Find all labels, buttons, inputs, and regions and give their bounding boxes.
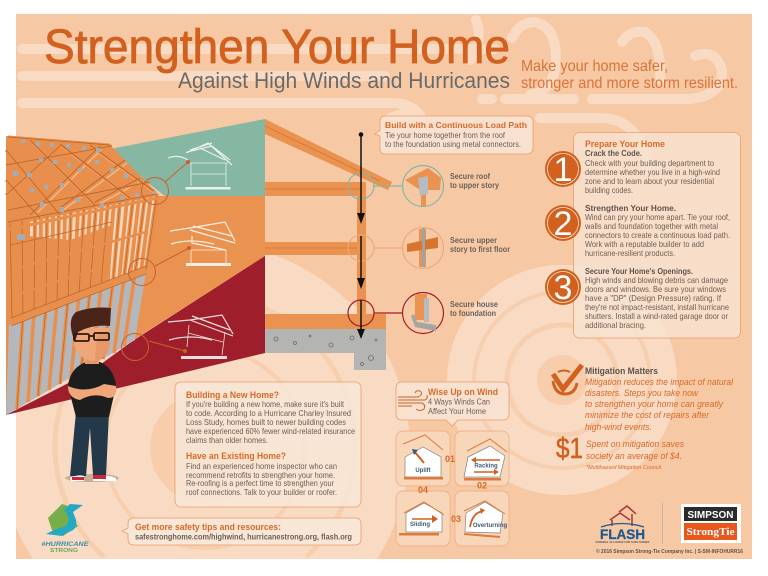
tagline: Make your home safer, <box>521 58 668 75</box>
callout: resources: safestronghome.com/highwind, hurricanestrong.org, flash.org <box>135 532 352 542</box>
panel: prepare your home: zone and to learn about your residential <box>585 177 714 186</box>
lower wall sheathing <box>6 272 146 415</box>
panel: prepare your home: hurricane-resilient products. <box>585 249 675 258</box>
panel: prepare your home: additional bracing. <box>585 321 646 330</box>
mitigation matters: Mitigation reduces the impact of natural <box>585 377 734 388</box>
tagline: stronger and more storm resilient. <box>521 75 738 92</box>
building cross-section <box>265 119 392 370</box>
callout: resources: Get more safety tips and resources: <box>135 522 281 532</box>
step 1 badge: 1 <box>554 151 572 189</box>
panel: prepare your home: Check with your building department to <box>585 159 714 168</box>
icon: check mark <box>553 365 582 394</box>
detail labels: to upper story <box>450 181 500 190</box>
title: Strengthen Your Home <box>44 21 510 74</box>
connection circles <box>348 173 402 326</box>
floor beam <box>11 270 146 322</box>
panel: new and existing home: Find an experienced home inspector who can <box>186 462 337 471</box>
mitigation matters: to strengthen your home can greatly <box>585 399 724 410</box>
logo: hurricane strong: STRONG <box>50 548 78 554</box>
detail labels: Secure upper <box>450 236 497 245</box>
panel: prepare your home: Wind can pry your home apart. Tie your roof, <box>585 213 730 222</box>
callout: continuous load path <box>375 116 533 154</box>
detail: roof connector <box>402 166 444 206</box>
tagline <box>521 58 738 92</box>
mitigation matters: Mitigation Matters <box>585 366 658 376</box>
wind type: uplift <box>396 431 450 486</box>
mitigation matters: disasters. Steps you take now <box>585 388 699 399</box>
step 2 badge <box>545 205 581 243</box>
divider <box>662 503 664 544</box>
stat: dollar savings: $1 <box>556 433 583 465</box>
house sketch: roof failure <box>168 143 232 190</box>
callout: continuous load path: to the foundation using metal connectors. <box>385 140 521 149</box>
panel: new and existing home: If you're building a new home, make sure it's built <box>186 400 345 409</box>
panel: new and existing home: Re-roofing is a perfect time to strengthen your <box>186 479 334 488</box>
callout: continuous load path: Build with a Continuous Load Path <box>385 120 527 130</box>
mitigation matters: minimize the cost of repairs after <box>585 410 710 421</box>
wind type: racking <box>455 431 509 486</box>
panel: prepare your home: Secure Your Home's Openings. <box>585 267 693 276</box>
logo: flash: FLASH <box>600 526 645 542</box>
panel: new and existing home: Have an Existing Home? <box>186 451 286 462</box>
house frame illustration <box>6 136 158 415</box>
callout: resources <box>122 518 361 545</box>
detail labels: story to first floor <box>450 245 510 254</box>
panel: prepare your home: building codes. <box>585 186 633 195</box>
stat: dollar savings: society an average of $4. <box>586 451 682 462</box>
panel: new and existing home: claims than older homes. <box>186 436 268 445</box>
icon: wind <box>398 391 427 410</box>
panel: prepare your home: High winds and blowing debris can damage <box>585 276 728 285</box>
panel: exploded colour bands <box>6 119 265 415</box>
leader: foundation <box>122 334 186 360</box>
sequence numbers: 02 <box>477 480 487 490</box>
panel: new and existing home <box>175 382 361 507</box>
callout: continuous load path: Tie your home together from the roof <box>385 131 506 140</box>
load path arrow <box>357 132 365 339</box>
wind type: sliding <box>396 491 450 546</box>
logo: hurricane strong: #HURRICANE <box>42 541 89 548</box>
panel: prepare your home: have a "DP" (Design Pressure) rating. If <box>585 294 722 303</box>
panel: prepare your home: walls and foundation together with metal <box>584 222 718 231</box>
sequence numbers: 04 <box>418 485 428 495</box>
panel: prepare your home: they're not impact-resistant, install hurricane <box>585 303 729 312</box>
upper wall light gaps <box>28 196 157 282</box>
wind type: overturning <box>455 491 509 546</box>
wind type: uplift: Uplift <box>415 468 431 474</box>
sequence numbers: 01 <box>445 454 455 464</box>
panel: new and existing home: Building a New Home? <box>186 390 279 401</box>
step 1 badge <box>545 151 581 189</box>
sequence numbers <box>418 454 487 524</box>
panel: new and existing home: have experienced 60% fewer wind-related insurance <box>186 427 355 436</box>
mitigation matters <box>585 366 734 433</box>
step 3 badge <box>545 269 581 307</box>
detail labels: to foundation <box>450 309 496 318</box>
house sketch: foundation failure <box>168 315 233 359</box>
detail labels <box>450 172 510 318</box>
panel: new and existing home: recommend retrofits to strengthen your home. <box>186 471 335 480</box>
panel: prepare your home: Work with a reputable builder to add <box>585 240 704 249</box>
callout: wise up on wind <box>396 382 509 426</box>
panel: prepare your home: determine whether you live in a high-wind <box>585 168 720 177</box>
leader: roof <box>142 160 190 204</box>
stat: dollar savings: Spent on mitigation saves <box>586 439 684 450</box>
stat: dollar savings: *Multihazard Mitigation Council <box>586 465 662 471</box>
callout: wise up on wind: Wise Up on Wind <box>428 387 498 397</box>
detail labels: Secure roof <box>450 172 490 181</box>
logo: flash: FEDERAL ALLIANCE FOR SAFE HOMES <box>596 540 650 544</box>
subtitle: Against High Winds and Hurricanes <box>178 68 510 93</box>
logo: flash <box>596 506 650 544</box>
metal connectors <box>13 139 156 240</box>
wind type: overturning: Overturning <box>473 523 507 529</box>
logo: hurricane strong <box>42 504 89 554</box>
step 3 badge: 3 <box>554 269 572 307</box>
stat: dollar savings <box>556 433 684 471</box>
house sketch: upper story failure <box>170 222 235 266</box>
panel: prepare your home: Prepare Your Home <box>585 139 665 150</box>
panel: prepare your home <box>574 132 740 338</box>
roof trusses <box>8 143 157 218</box>
panel: prepare your home: doors and windows. Be sure your windows <box>585 285 726 294</box>
panel: prepare your home: connectors to create a continuous load path. <box>585 231 730 240</box>
logo: simpson strong-tie: StrongTie <box>686 527 735 538</box>
callout: wise up on wind: Affect Your Home <box>428 407 487 416</box>
logo: simpson strong-tie <box>681 504 741 543</box>
step 2 badge: 2 <box>554 205 572 243</box>
panel: prepare your home: shutters. Install a wind-rated garage door or <box>585 312 728 321</box>
panel: new and existing home: Loss Study, homes built to newer building codes <box>186 418 346 427</box>
callout: wise up on wind: 4 Ways Winds Can <box>428 398 490 406</box>
leader: wall <box>128 246 190 286</box>
sequence numbers: 03 <box>451 514 461 524</box>
concrete foundation <box>265 329 386 370</box>
mitigation matters: high-wind events. <box>585 422 652 433</box>
character <box>65 308 119 482</box>
detail: floor connector <box>402 228 444 268</box>
detail labels: Secure house <box>450 300 499 309</box>
wind type: sliding: Sliding <box>410 522 430 528</box>
detail: foundation connector <box>402 292 444 334</box>
panel: new and existing home: roof connections. Talk to your builder or roofer. <box>186 488 337 497</box>
logo: simpson strong-tie: SIMPSON <box>688 510 734 521</box>
wind type: racking: Racking <box>474 464 498 470</box>
panel: prepare your home: Strengthen Your Home. <box>585 204 676 213</box>
copyright: © 2016 Simpson Strong-Tie Company Inc. | S-SM-INFOHURR16 <box>596 548 743 555</box>
panel: new and existing home: to code. According to a Hurricane Charley Insured <box>186 409 351 418</box>
panel: prepare your home: Crack the Code. <box>585 149 642 158</box>
